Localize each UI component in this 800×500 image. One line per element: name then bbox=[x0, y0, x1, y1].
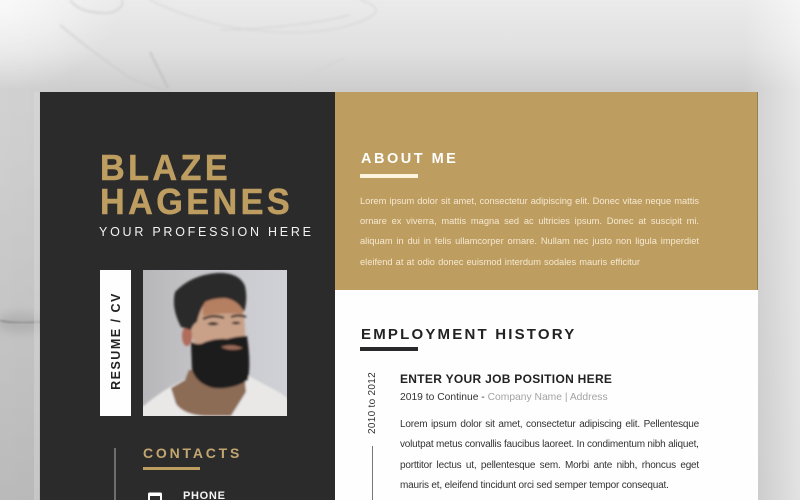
timeline line: contacts bbox=[114, 448, 116, 500]
portrait photo bbox=[143, 270, 287, 416]
employment underline bbox=[360, 347, 418, 351]
icon: phone bbox=[148, 492, 162, 500]
employment history heading: EMPLOYMENT HISTORY bbox=[361, 326, 576, 343]
job entry bbox=[400, 372, 700, 491]
about me text: eleifend at at odio donec euismod interdum sodales mauris efficitur bbox=[360, 257, 640, 267]
hair bbox=[174, 273, 246, 330]
panel: about me bbox=[335, 92, 758, 290]
job description: porttitor lectus ut, pellentesque sem. Morbi ante nibh, rhoncus eget bbox=[400, 460, 699, 471]
beard bbox=[191, 336, 249, 388]
shirt bbox=[141, 375, 289, 418]
contacts underline bbox=[143, 467, 200, 470]
about me heading: ABOUT ME bbox=[361, 151, 458, 167]
timeline line: job bbox=[372, 446, 373, 500]
panel: employment history bbox=[335, 290, 758, 500]
about me text: aliquam in dui in felis ullamcorper ornare. Nullam nec justo non ligula imperdiet bbox=[360, 236, 699, 246]
tab label: RESUME / CV bbox=[109, 292, 123, 390]
job description: Lorem ipsum dolor sit amet, consectetur adipiscing elit. Pellentesque bbox=[400, 419, 699, 430]
about me text: ornare ex viverra, mattis magna sed ac ultricies ipsum. Donec at suscipit mi. bbox=[360, 216, 699, 226]
job description: volutpat metus convallis faucibus laoreet. In condimentum nibh aliquet, bbox=[400, 439, 699, 450]
ear bbox=[182, 326, 192, 346]
neck and chest bbox=[171, 370, 246, 416]
name: BLAZE bbox=[100, 147, 231, 188]
resume / cv tab bbox=[100, 270, 131, 416]
job meta: 2019 to Continue - Company Name | Address bbox=[400, 392, 608, 403]
job description bbox=[400, 419, 700, 491]
panel: dark sidebar bbox=[40, 92, 335, 500]
contacts title: CONTACTS bbox=[143, 445, 242, 461]
about me underline bbox=[360, 174, 418, 178]
profession: YOUR PROFESSION HERE bbox=[99, 225, 314, 239]
name: HAGENES bbox=[100, 181, 293, 222]
about me text bbox=[360, 196, 699, 267]
job title: ENTER YOUR JOB POSITION HERE bbox=[400, 372, 612, 386]
about me text: Lorem ipsum dolor sit amet, consectetur adipiscing elit. Donec vitae neque mattis bbox=[360, 196, 699, 206]
name bbox=[100, 147, 293, 222]
job description: mauris et, eleifend tincidunt orci sed semper tempor consequat. bbox=[400, 480, 669, 491]
eyes and brows bbox=[203, 316, 246, 319]
face bbox=[189, 294, 245, 362]
date range: 2010 to 2012 bbox=[367, 372, 378, 434]
contacts heading bbox=[143, 445, 242, 470]
